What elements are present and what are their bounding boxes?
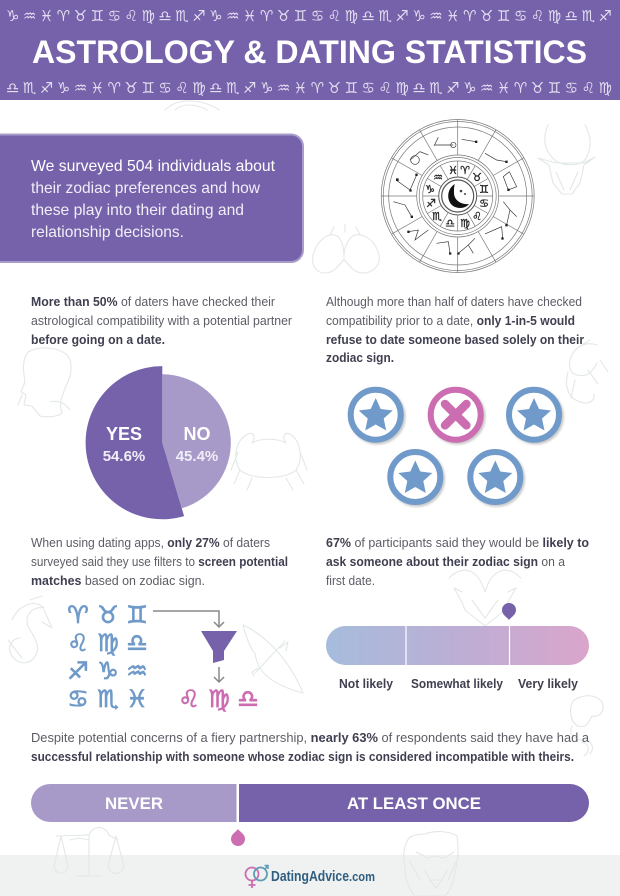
pie chart: NO	[184, 424, 210, 444]
badge 2: refused	[431, 390, 482, 442]
blue zodiac grid: ♑︎	[97, 658, 119, 685]
title: ASTROLOGY & DATING STATISTICS	[32, 34, 587, 70]
badge 4	[390, 452, 442, 504]
text: compatibility check	[31, 295, 292, 347]
logo	[246, 866, 375, 888]
zodiac glyph strip: bottom: ♎︎♏︎♐︎♑︎♒︎♓︎♈︎♉︎♊︎♋︎♌︎♍︎♎︎♏︎♐︎♑︎♒︎♓︎♈︎♉︎♊︎♋︎♌︎♍︎♎︎♏︎♐︎♑︎♒︎♓︎♈︎♉︎♊︎♋︎♌︎♍︎	[6, 79, 612, 97]
zodiac signs ring: ♍︎	[460, 218, 470, 230]
badge 1	[351, 390, 402, 442]
zodiac signs ring: ♒︎	[433, 172, 443, 184]
text: refuse to date	[326, 295, 584, 365]
slice: yes	[86, 366, 184, 519]
moon	[448, 184, 469, 208]
pie chart: YES	[106, 424, 142, 444]
blue zodiac grid: ♉︎	[97, 602, 119, 629]
footer band	[0, 855, 620, 896]
funnel icon	[201, 631, 237, 663]
text: compatibility check: before going on a date.	[31, 333, 165, 347]
zodiac signs ring: ♐︎	[426, 198, 436, 210]
text: refuse to date: compatibility prior to a date, only 1-in-5 would	[326, 314, 575, 328]
marker drop	[231, 829, 245, 846]
text: dating app filters: matches based on zodiac sign.	[31, 574, 205, 588]
intro callout: relationship decisions.	[31, 224, 184, 241]
blue zodiac grid: ♒︎	[126, 658, 148, 685]
text: dating app filters: When using dating apps, only 27% of daters	[31, 536, 270, 550]
split bar: AT LEAST ONCE	[347, 794, 481, 813]
intro callout: these play into their dating and	[31, 202, 244, 219]
zodiac signs ring: ♓︎	[448, 165, 458, 177]
blue zodiac grid	[67, 602, 148, 713]
text: compatibility check: More than 50% of daters have checked their	[31, 295, 275, 309]
zodiac wheel	[381, 120, 534, 272]
badge 5	[470, 452, 522, 504]
header banner	[0, 0, 620, 100]
logo: DatingAdvice	[271, 868, 349, 885]
text: incompatible relationships	[31, 731, 589, 764]
split bar	[31, 784, 589, 822]
intro callout: We surveyed 504 individuals about	[31, 158, 276, 175]
text: refuse to date: Although more than half of daters have checked	[326, 295, 582, 309]
likelihood scale: Somewhat likely	[411, 677, 503, 691]
pink result signs: ♎︎	[237, 686, 259, 713]
pie chart: 54.6%	[103, 448, 145, 465]
intro callout	[0, 134, 303, 262]
likelihood scale: Very likely	[518, 677, 578, 691]
marker	[502, 603, 516, 620]
zodiac signs ring: ♉︎	[472, 172, 482, 184]
zodiac signs ring: ♈︎	[460, 165, 470, 177]
text: incompatible relationships: Despite potential concerns of a fiery partnership, nearly 63% of respondents said they have had a	[31, 731, 589, 745]
blue zodiac grid: ♓︎	[126, 686, 148, 713]
pink result signs: ♍︎	[208, 686, 230, 713]
pie chart	[86, 366, 231, 519]
text: refuse to date: refuse to date someone based solely on their	[326, 333, 584, 347]
blue zodiac grid: ♌︎	[67, 630, 89, 657]
zodiac signs ring	[425, 165, 489, 230]
blue zodiac grid: ♍︎	[97, 630, 119, 657]
blue zodiac grid: ♈︎	[67, 602, 89, 629]
slice: no	[162, 374, 231, 508]
blue zodiac grid: ♏︎	[97, 686, 119, 713]
blue zodiac grid: ♊︎	[126, 602, 148, 629]
zodiac signs ring: ♌︎	[472, 211, 482, 223]
badge 3	[509, 390, 561, 442]
likelihood scale: Not likely	[339, 677, 393, 691]
blue zodiac grid: ♋︎	[67, 686, 89, 713]
funnel diagram	[67, 602, 259, 713]
split bar: NEVER	[105, 794, 163, 813]
likelihood scale	[326, 603, 589, 691]
intro callout: their zodiac preferences and how	[31, 180, 260, 197]
icons: refusal badges	[351, 390, 561, 504]
arrow into funnel	[153, 611, 224, 627]
pie chart: 45.4%	[176, 448, 218, 465]
zodiac signs ring: ♎︎	[445, 218, 455, 230]
text: dating app filters: surveyed said they use filters to screen potential	[31, 555, 288, 569]
text: dating app filters	[31, 536, 288, 588]
pink result signs: ♌︎	[178, 686, 200, 713]
text: compatibility check: astrological compatibility with a potential partner	[31, 314, 292, 328]
zodiac signs ring: ♑︎	[425, 184, 435, 196]
blue zodiac grid: ♎︎	[126, 630, 148, 657]
text: first date question: ask someone about their zodiac sign on a	[326, 555, 565, 569]
text: incompatible relationships: successful relationship with someone whose zodiac sign is considered incompatible with theirs.	[31, 750, 574, 764]
zodiac signs ring: ♋︎	[479, 198, 489, 210]
text: first date question	[326, 536, 589, 588]
text: first date question: 67% of participants said they would be likely to	[326, 536, 589, 550]
zodiac glyph strip: top: ♑︎♒︎♓︎♈︎♉︎♊︎♋︎♌︎♍︎♎︎♏︎♐︎♑︎♒︎♓︎♈︎♉︎♊︎♋︎♌︎♍︎♎︎♏︎♐︎♑︎♒︎♓︎♈︎♉︎♊︎♋︎♌︎♍︎♎︎♏︎♐︎	[6, 7, 612, 25]
pink result signs	[178, 686, 259, 713]
zodiac signs ring: ♏︎	[432, 211, 442, 223]
text: first date question: first date.	[326, 574, 375, 588]
blue zodiac grid: ♐︎	[67, 658, 89, 685]
logo: .com	[349, 870, 375, 884]
constellations	[393, 137, 517, 255]
zodiac signs ring: ♊︎	[479, 184, 489, 196]
arrow out of funnel	[214, 667, 224, 682]
text: refuse to date: zodiac sign.	[326, 351, 394, 365]
